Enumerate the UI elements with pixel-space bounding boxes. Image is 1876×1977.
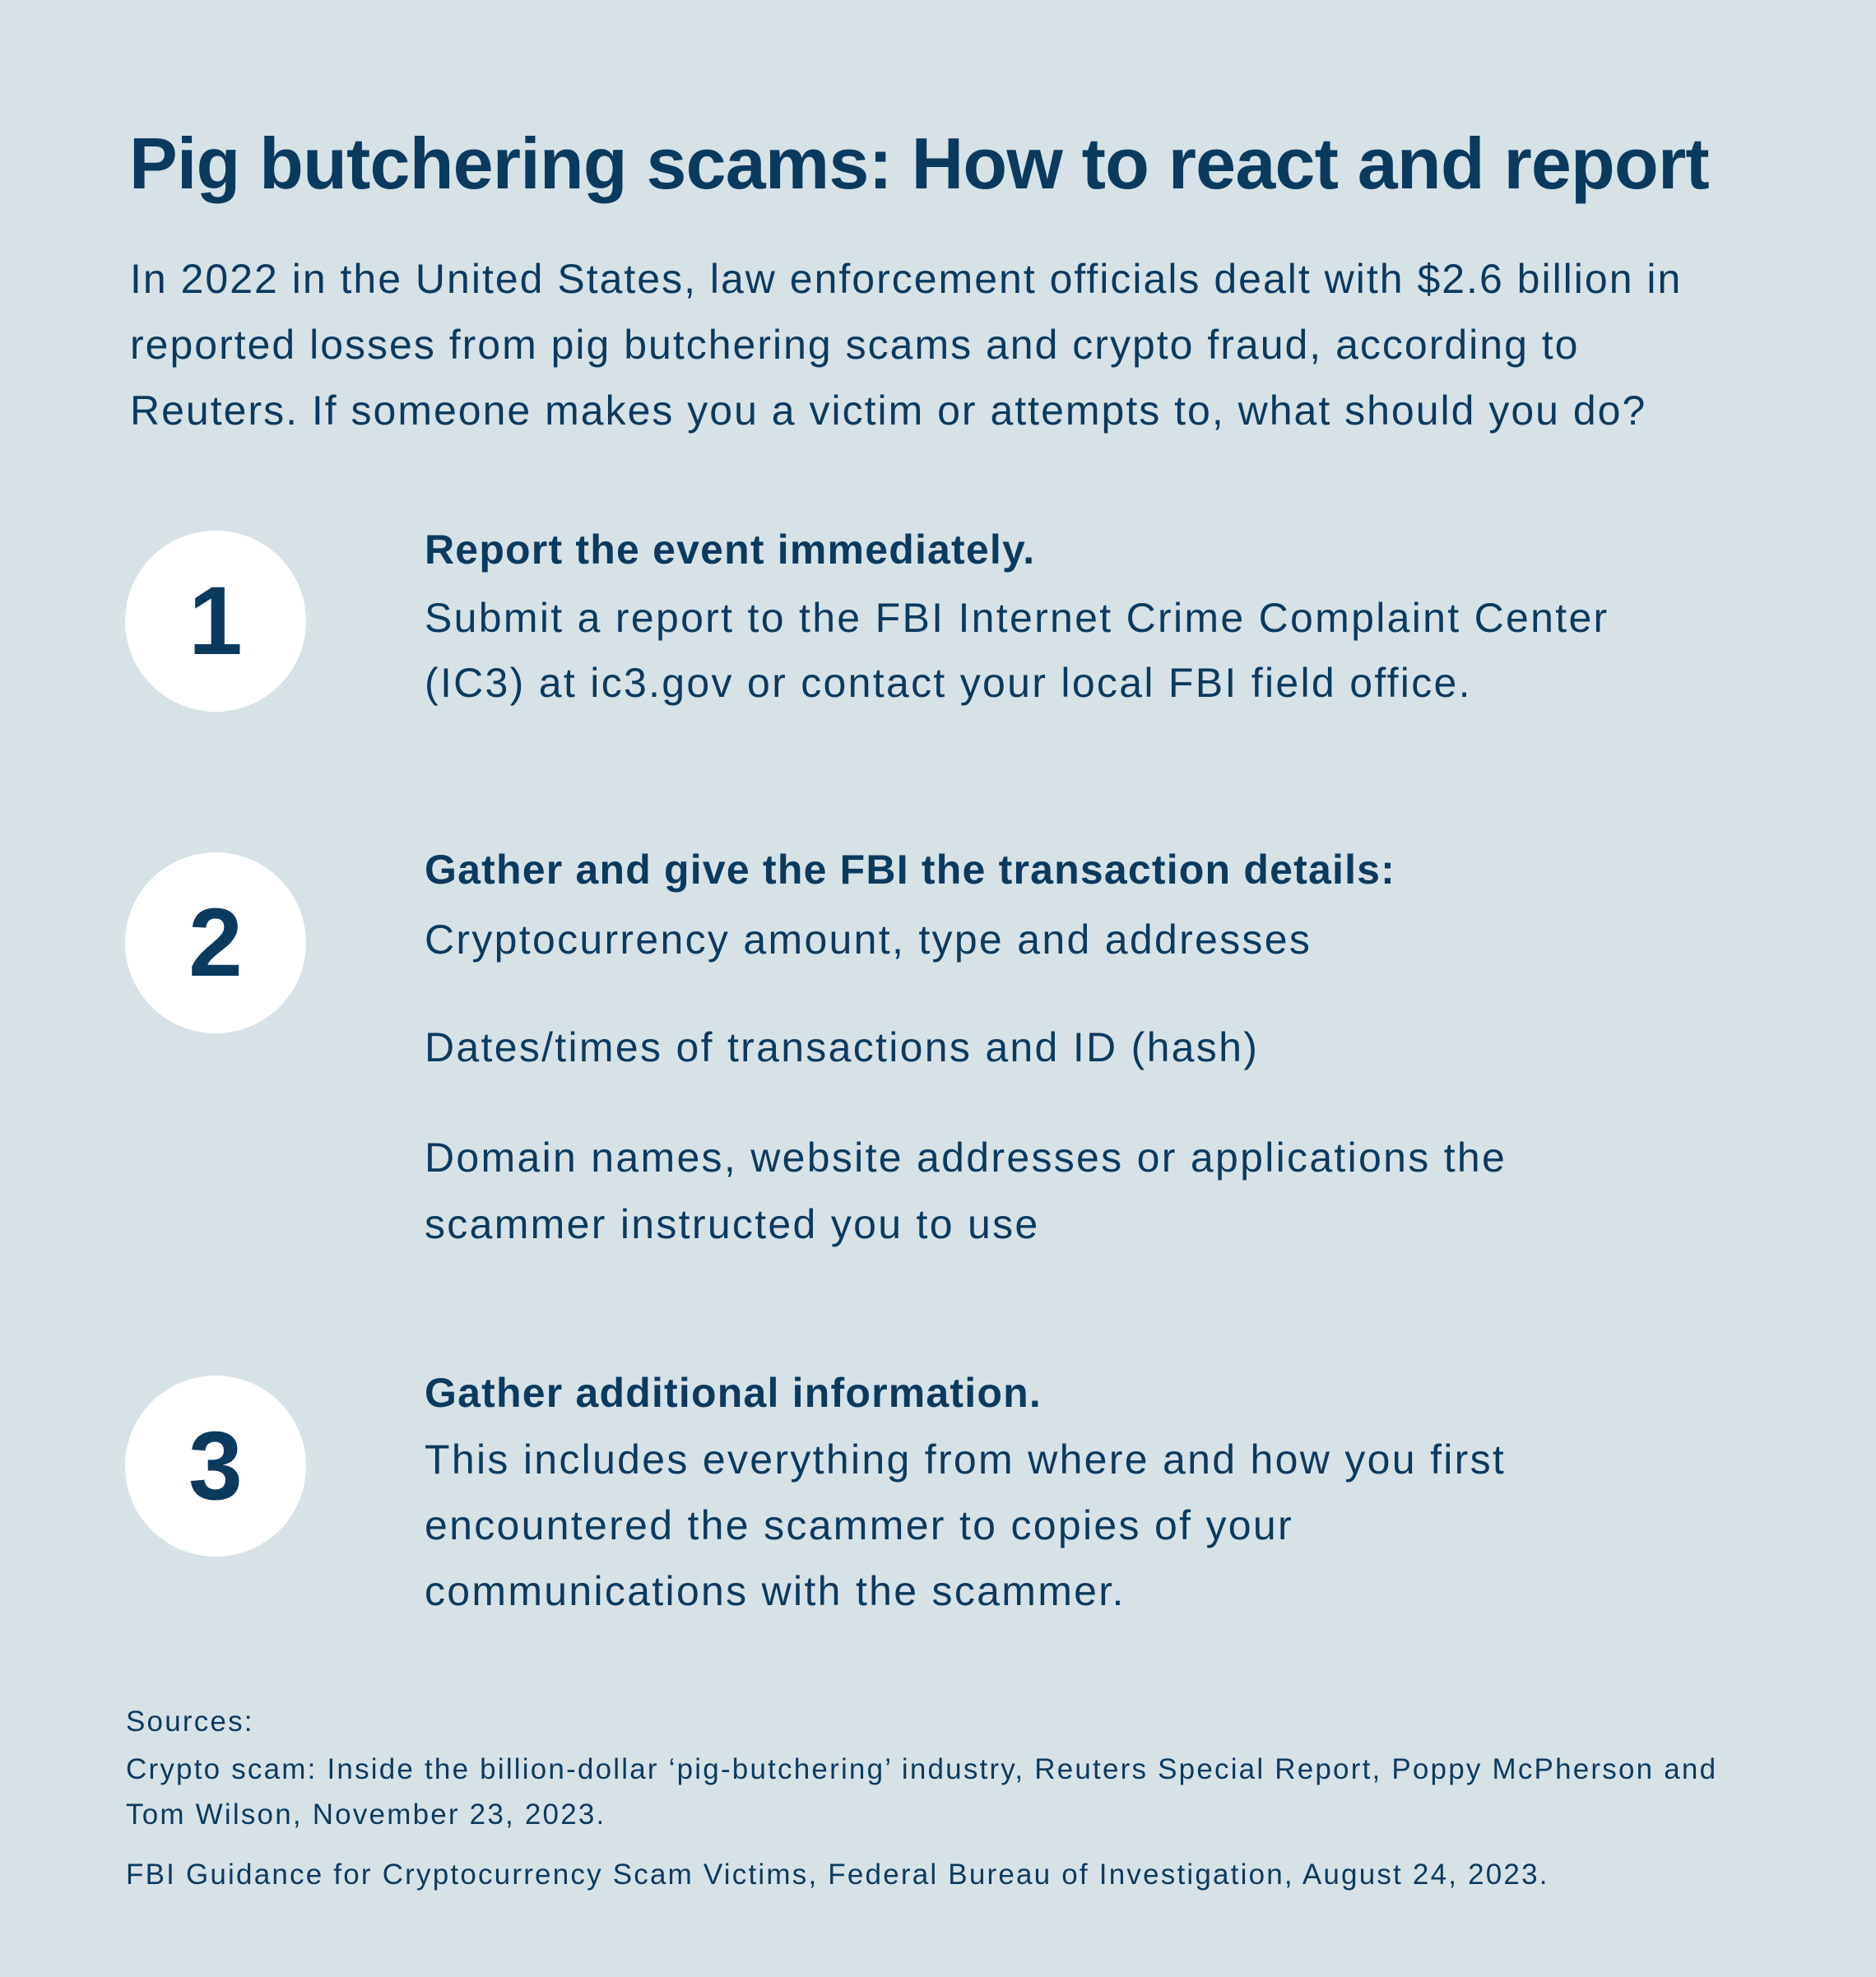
step 3 text: Gather additional information. [425, 1370, 1042, 1416]
step 1 number circle [125, 531, 306, 712]
step 1 text: (IC3) at ic3.gov or contact your local FBI field office. [425, 660, 1472, 706]
step 3 number circle [125, 1376, 306, 1557]
step 1 number circle: 1 [188, 567, 243, 675]
sources: Crypto scam: Inside the billion-dollar ‘pig-butchering’ industry, Reuters Special Report, Poppy McPherson and [126, 1753, 1717, 1785]
step 2 number circle: 2 [188, 889, 243, 997]
step 2 text: Domain names, website addresses or applications the [425, 1135, 1507, 1181]
intro text: reported losses from pig butchering scams and crypto fraud, according to [130, 322, 1579, 368]
step 2 text: Gather and give the FBI the transaction details: [425, 847, 1395, 893]
step 2 number circle [125, 852, 306, 1033]
intro text: In 2022 in the United States, law enforcement officials dealt with $2.6 billion in [130, 256, 1682, 302]
step 3 text: communications with the scammer. [425, 1568, 1126, 1614]
step 3 text: encountered the scammer to copies of your [425, 1502, 1293, 1548]
sources [126, 1706, 1717, 1891]
sources: Sources: [126, 1706, 254, 1738]
step 2 text: Dates/times of transactions and ID (hash) [425, 1024, 1259, 1070]
step 1 text: Submit a report to the FBI Internet Crime Complaint Center [425, 595, 1609, 641]
intro text [130, 256, 1682, 434]
intro text: Reuters. If someone makes you a victim or attempts to, what should you do? [130, 388, 1646, 434]
step 3 text: This includes everything from where and how you first [425, 1436, 1506, 1483]
step 1 text [425, 527, 1609, 706]
sources: FBI Guidance for Cryptocurrency Scam Victims, Federal Bureau of Investigation, August 24, 2023. [126, 1859, 1549, 1891]
title: Pig butchering scams: How to react and report [129, 123, 1709, 204]
step 3 text [425, 1370, 1506, 1614]
sources: Tom Wilson, November 23, 2023. [126, 1798, 606, 1831]
step 2 text: Cryptocurrency amount, type and addresses [425, 917, 1312, 963]
step 2 text [425, 847, 1507, 1247]
step 3 number circle: 3 [188, 1412, 243, 1520]
step 1 text: Report the event immediately. [425, 527, 1035, 573]
step 2 text: scammer instructed you to use [425, 1201, 1040, 1247]
